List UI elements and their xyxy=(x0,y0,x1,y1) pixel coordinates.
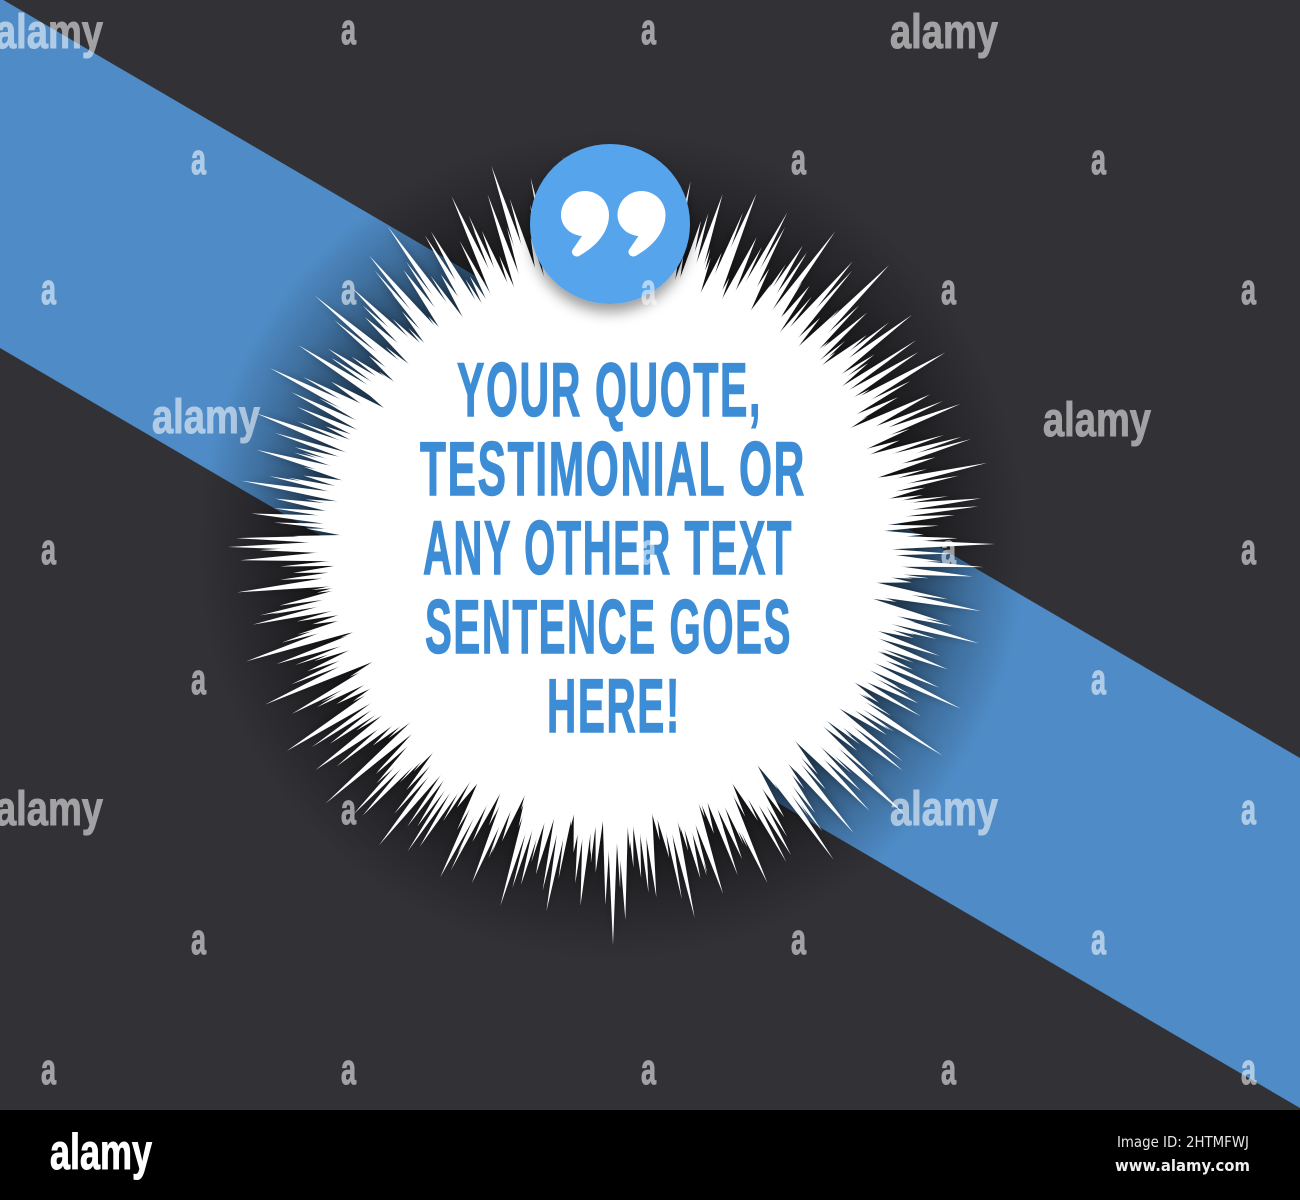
footer bar xyxy=(0,1110,1300,1200)
watermarks: a xyxy=(641,265,656,314)
watermarks: a xyxy=(941,1045,956,1094)
watermarks: a xyxy=(41,265,56,314)
quote text: SENTENCE GOES xyxy=(425,585,792,670)
watermarks: alamy xyxy=(152,391,260,444)
footer logo: alamy xyxy=(50,1124,152,1180)
quote text xyxy=(420,348,806,749)
website: www.alamy.com xyxy=(1115,1156,1250,1175)
watermarks: a xyxy=(341,5,356,54)
watermarks: a xyxy=(341,265,356,314)
watermarks: a xyxy=(1241,1045,1256,1094)
watermarks: a xyxy=(1241,785,1256,834)
watermarks: a xyxy=(1241,525,1256,574)
watermarks: a xyxy=(1091,135,1106,184)
watermarks: a xyxy=(641,1045,656,1094)
quote text: ANY OTHER TEXT xyxy=(423,506,793,591)
watermarks: a xyxy=(41,1045,56,1094)
badge circle xyxy=(530,144,690,304)
quote text: YOUR QUOTE, xyxy=(457,348,762,433)
watermarks: a xyxy=(941,265,956,314)
watermarks: a xyxy=(191,915,206,964)
quote text: TESTIMONIAL OR xyxy=(420,427,806,512)
watermarks: a xyxy=(191,135,206,184)
watermarks: a xyxy=(791,915,806,964)
quotation marks xyxy=(561,191,666,256)
icon: quote badge xyxy=(530,144,690,304)
watermarks: a xyxy=(341,1045,356,1094)
watermarks: a xyxy=(791,135,806,184)
watermarks: a xyxy=(341,525,356,574)
image id: Image ID: 2HTMFWJ xyxy=(1117,1133,1249,1151)
watermarks: a xyxy=(941,525,956,574)
watermarks: alamy xyxy=(1043,394,1151,447)
watermarks: a xyxy=(341,785,356,834)
watermarks: alamy xyxy=(890,6,998,59)
watermarks: alamy xyxy=(890,783,998,836)
watermarks: a xyxy=(641,525,656,574)
quote text: HERE! xyxy=(547,664,681,749)
watermarks: a xyxy=(1241,265,1256,314)
watermarks: a xyxy=(641,5,656,54)
white spiky burst xyxy=(138,65,1089,1023)
watermarks: a xyxy=(1091,915,1106,964)
watermarks: a xyxy=(41,525,56,574)
watermarks: a xyxy=(1091,655,1106,704)
watermarks: a xyxy=(191,655,206,704)
burst shadow xyxy=(197,130,1027,960)
